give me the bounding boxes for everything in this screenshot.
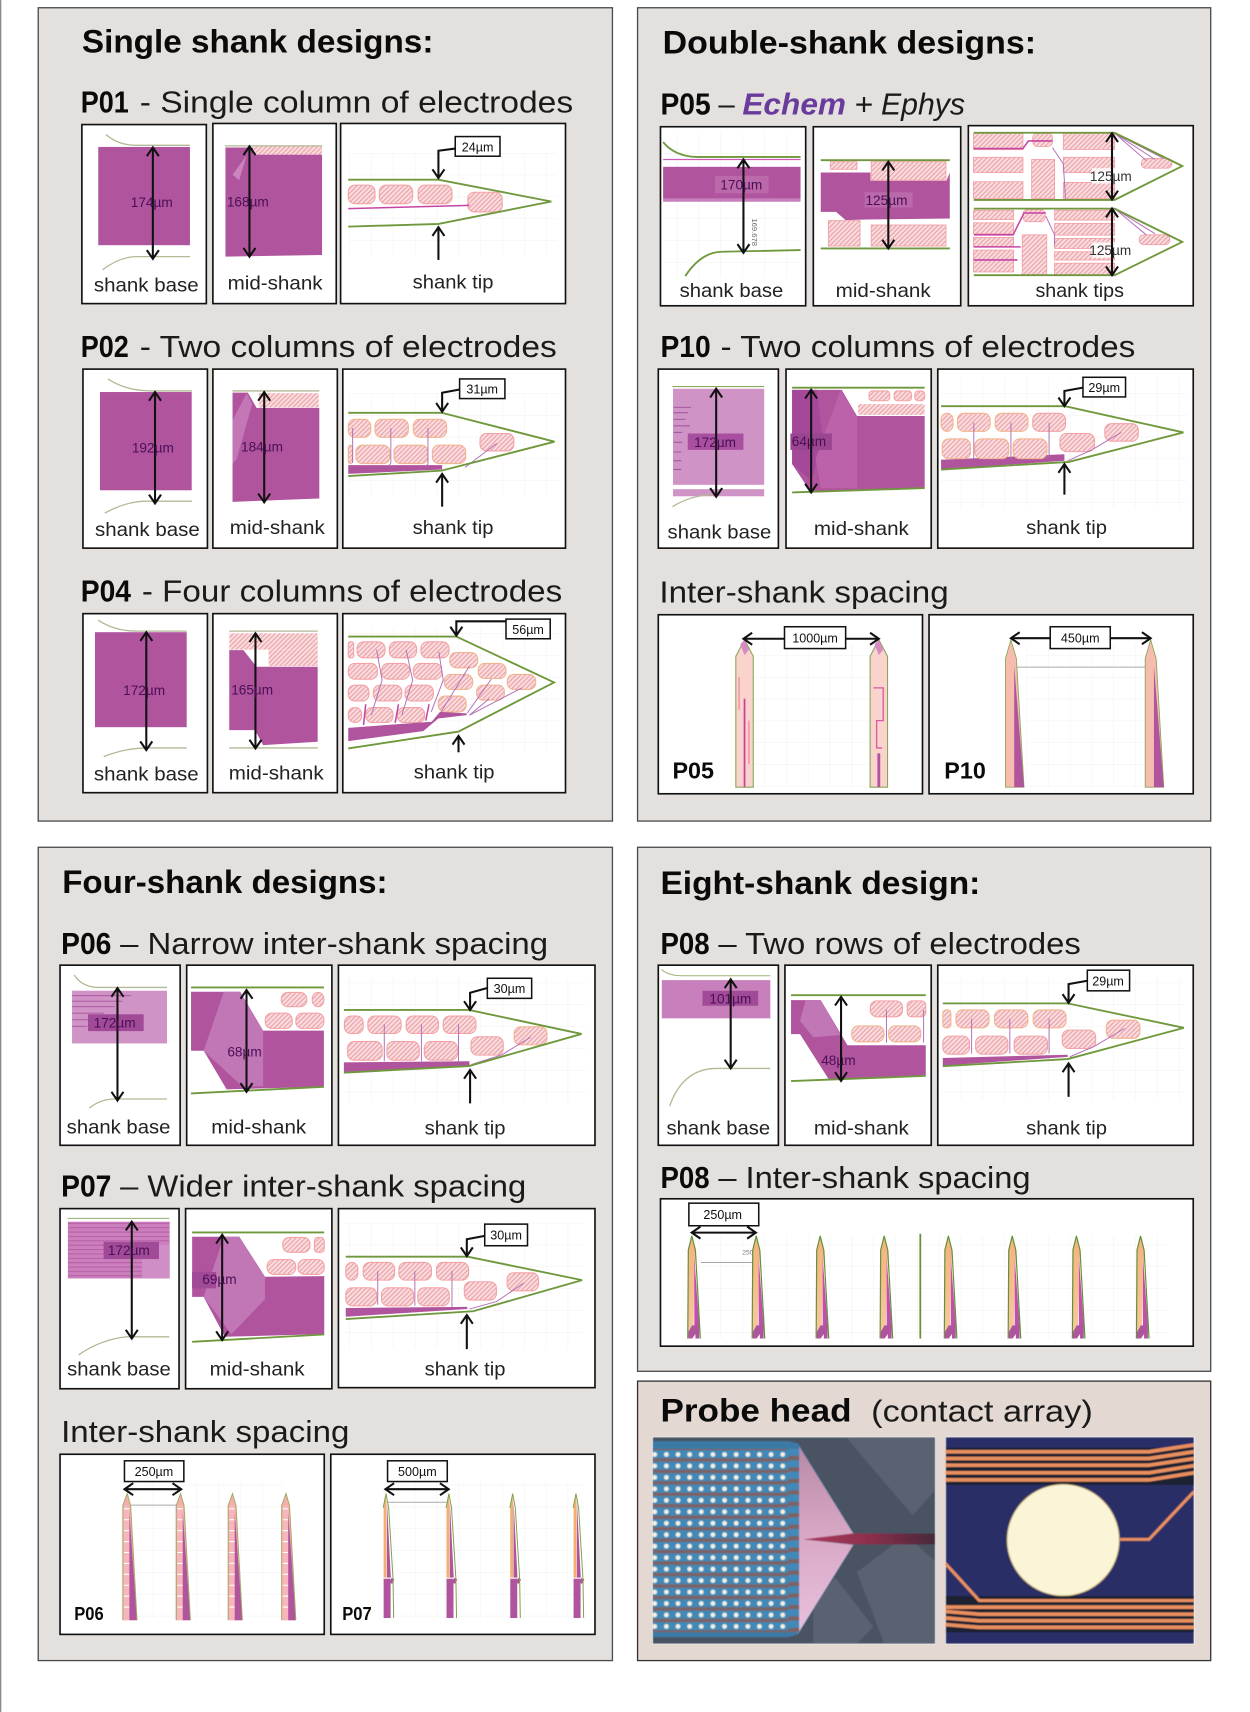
photo: contact array on shank head xyxy=(652,1437,936,1644)
P01 shank base xyxy=(82,125,206,304)
P08 shank tip xyxy=(938,965,1193,1145)
subheading: P05: Echem xyxy=(742,88,846,122)
shank left xyxy=(736,640,753,787)
heading: eight-shank: Eight-shank design: xyxy=(660,864,980,901)
P08 inter-shank panel: 250 xyxy=(742,1249,754,1256)
P06 shank tip xyxy=(338,965,595,1145)
P04 mid-shank: 165µm xyxy=(231,682,273,697)
left edge line xyxy=(0,0,1,1712)
P10 shank base: shank base xyxy=(668,521,771,543)
P06 inter-shank panel: P06 xyxy=(74,1603,104,1624)
subheading: P04: - Four columns of electrodes xyxy=(142,575,562,609)
P05 inter-shank panel: 1000µm xyxy=(792,632,838,646)
P02 shank base: 192µm xyxy=(132,441,174,456)
subheading: P10: P10 xyxy=(660,330,711,364)
P10 mid-shank xyxy=(786,369,931,548)
shank left xyxy=(1005,640,1024,787)
subheading: P04: P04 xyxy=(81,575,131,609)
subheading: P07: – Wider inter-shank spacing xyxy=(120,1170,526,1204)
P05 shank base: 169.678 xyxy=(750,218,759,246)
P07 inter-shank panel xyxy=(331,1454,595,1634)
heading: probe head: (contact array) xyxy=(871,1395,1093,1429)
eight shanks xyxy=(688,1236,1149,1339)
subheading: P01: P01 xyxy=(81,86,129,120)
P04 mid-shank xyxy=(213,614,337,793)
P10 shank base xyxy=(658,369,778,548)
subheading: P05: Ephys xyxy=(881,88,965,122)
P01 shank tip: shank tip xyxy=(413,271,494,293)
P07 shank tip: 30µm xyxy=(490,1229,522,1243)
subheading: P02: P02 xyxy=(81,330,129,364)
P01 shank tip xyxy=(341,123,566,304)
P02 shank base: shank base xyxy=(95,519,200,541)
shank right xyxy=(1145,640,1164,787)
P07 inter-shank panel: 500µm xyxy=(398,1465,437,1479)
P06 mid-shank: mid-shank xyxy=(211,1116,306,1138)
P05 mid-shank: 125µm xyxy=(865,193,907,208)
P06 shank base: 172µm xyxy=(94,1015,136,1030)
P07 mid-shank xyxy=(186,1209,332,1389)
P06 shank tip: shank tip xyxy=(425,1117,506,1139)
P08 shank tip: shank tip xyxy=(1026,1117,1107,1139)
subheading: P08 spacing: P08 xyxy=(660,1161,710,1195)
photo: contact pad and traces xyxy=(945,1437,1194,1644)
subheading: P07: P07 xyxy=(61,1170,111,1204)
P07 mid-shank: 69µm xyxy=(202,1272,237,1287)
P04 shank tip xyxy=(343,614,566,793)
P08 mid-shank: mid-shank xyxy=(814,1117,909,1139)
shanks xyxy=(383,1494,584,1618)
subheading: P08 rows: – Two rows of electrodes xyxy=(718,927,1081,961)
P02 shank tip xyxy=(343,369,566,548)
panel: double-shank designs xyxy=(638,8,1211,821)
shank right xyxy=(870,640,888,787)
P06 mid-shank: 68µm xyxy=(227,1044,262,1059)
P07 shank tip xyxy=(338,1209,595,1388)
P06 inter-shank panel: 250µm xyxy=(135,1465,173,1479)
P05 mid-shank: mid-shank xyxy=(836,280,931,302)
P05 shank tips: 125µm xyxy=(1089,243,1131,258)
P05 shank base: shank base xyxy=(680,280,783,302)
P08 mid-shank xyxy=(785,965,931,1145)
P07 shank base: shank base xyxy=(67,1359,171,1381)
subheading: P10: - Two columns of electrodes xyxy=(721,330,1135,364)
heading: single shank: Single shank designs: xyxy=(82,23,433,60)
P02 shank tip: shank tip xyxy=(413,517,494,539)
P05 shank tips xyxy=(968,126,1193,306)
P05 shank tips: 125µm xyxy=(1090,169,1132,184)
P07 shank base: 172µm xyxy=(108,1243,150,1258)
P07 shank base xyxy=(60,1209,179,1389)
subheading: P06: – Narrow inter-shank spacing xyxy=(120,927,548,961)
P10 inter-shank panel xyxy=(929,615,1193,794)
P07 shank tip: shank tip xyxy=(425,1359,506,1381)
heading: probe head: Probe head xyxy=(660,1392,852,1429)
shanks xyxy=(123,1494,296,1620)
P05 inter-shank panel xyxy=(658,615,922,794)
heading: probe head xyxy=(660,1392,1093,1429)
P02 mid-shank: 184µm xyxy=(241,440,283,455)
P04 shank base: shank base xyxy=(94,764,199,786)
P08 shank base xyxy=(658,965,778,1145)
panel: four-shank designs xyxy=(38,847,612,1661)
P06 inter-shank panel xyxy=(60,1454,324,1634)
subheading: P05 xyxy=(660,88,965,122)
subheading: P05: + xyxy=(855,88,873,122)
P02 shank tip: 31µm xyxy=(466,383,498,397)
P10 shank tip: 29µm xyxy=(1088,381,1120,395)
heading: inter-shank spacing (four): Inter-shank spacing xyxy=(61,1415,349,1449)
P05 shank base xyxy=(660,127,806,306)
P01 mid-shank: mid-shank xyxy=(228,272,323,294)
P02 mid-shank: mid-shank xyxy=(230,517,325,539)
P04 shank tip: 56µm xyxy=(512,623,544,637)
P01 shank tip: 24µm xyxy=(462,140,493,154)
P08 inter-shank panel: 250µm xyxy=(703,1208,742,1222)
P01 mid-shank: 168µm xyxy=(227,194,269,209)
P10 mid-shank: 64µm xyxy=(792,434,826,449)
P07 mid-shank: mid-shank xyxy=(210,1359,305,1381)
panel: eight-shank design xyxy=(638,847,1211,1371)
P06 mid-shank xyxy=(187,965,332,1145)
P02 mid-shank xyxy=(213,369,337,548)
P05 inter-shank panel: P05 xyxy=(672,757,714,783)
P06 shank tip: 30µm xyxy=(494,982,525,996)
panel: single shank designs xyxy=(38,8,612,821)
P04 mid-shank: mid-shank xyxy=(229,763,324,785)
P06 shank base: shank base xyxy=(67,1116,170,1138)
heading: double-shank: Double-shank designs: xyxy=(663,24,1036,61)
P08 mid-shank: 48µm xyxy=(821,1053,856,1068)
P05 shank tips: shank tips xyxy=(1035,280,1124,302)
P01 shank base: shank base xyxy=(94,275,199,297)
P10 inter-shank panel: 450µm xyxy=(1061,632,1100,646)
P04 shank tip: shank tip xyxy=(414,761,495,783)
heading: inter-shank spacing (double): Inter-shank spacing xyxy=(659,576,949,610)
subheading: P06: P06 xyxy=(61,927,111,961)
P06 shank base xyxy=(60,965,180,1145)
P10 inter-shank panel: P10 xyxy=(944,757,986,783)
P04 shank base: 172µm xyxy=(123,683,165,698)
P10 shank tip xyxy=(938,369,1193,548)
P08 shank base: shank base xyxy=(666,1117,770,1139)
subheading: P01: - Single column of electrodes xyxy=(140,86,573,120)
P08 shank tip: 29µm xyxy=(1092,974,1124,988)
P08 inter-shank panel xyxy=(660,1199,1193,1346)
P01 shank base: 174µm xyxy=(131,195,173,210)
P10 shank base: 172µm xyxy=(694,435,736,450)
P10 mid-shank: mid-shank xyxy=(814,518,909,540)
subheading: P05: – xyxy=(718,88,735,122)
subheading: P05: P05 xyxy=(660,88,711,122)
panel: probe head xyxy=(638,1381,1211,1661)
heading: four-shank: Four-shank designs: xyxy=(62,863,388,900)
subheading: P08 rows: P08 xyxy=(660,927,710,961)
P02 shank base xyxy=(83,369,207,548)
P01 mid-shank xyxy=(213,123,336,304)
subheading: P02: - Two columns of electrodes xyxy=(140,330,557,364)
P08 shank base: 101µm xyxy=(709,991,751,1006)
P07 inter-shank panel: P07 xyxy=(342,1603,372,1624)
P05 mid-shank xyxy=(813,127,961,306)
P10 shank tip: shank tip xyxy=(1026,517,1107,539)
subheading: P08 spacing: – Inter-shank spacing xyxy=(718,1161,1031,1195)
P04 shank base xyxy=(83,614,207,793)
P05 shank base: 170µm xyxy=(720,178,762,193)
